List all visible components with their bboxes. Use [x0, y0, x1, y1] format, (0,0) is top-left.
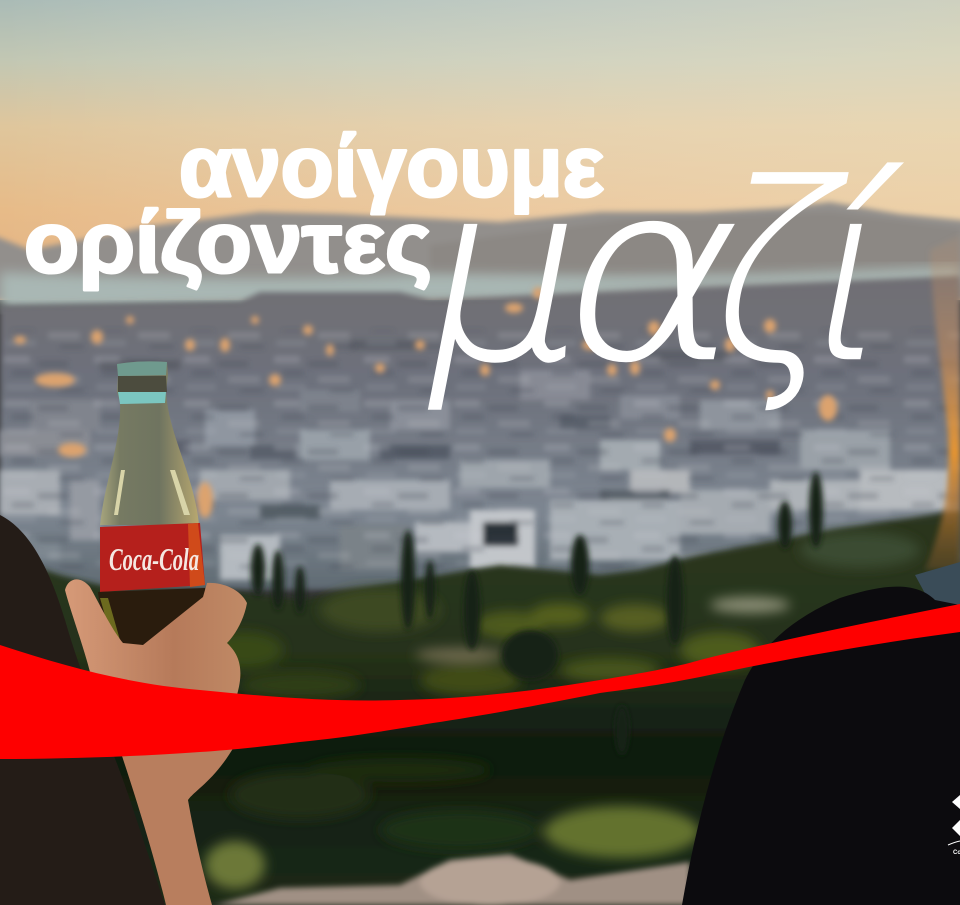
cypress trees	[251, 472, 823, 755]
buildings	[0, 340, 950, 580]
bottle	[98, 361, 206, 646]
large word: α	[538, 132, 774, 415]
hand holding the bottle	[65, 579, 247, 710]
headline	[24, 119, 929, 415]
glass highlights	[114, 470, 190, 515]
collar	[915, 562, 960, 612]
sea	[0, 266, 960, 310]
sky	[0, 0, 960, 300]
person right	[682, 235, 960, 905]
dark top	[682, 587, 960, 905]
large word: ί	[789, 132, 929, 415]
distant mountains	[0, 202, 960, 300]
neck rings	[117, 361, 167, 376]
trees	[0, 472, 960, 905]
line 2: ορίζοντες	[24, 195, 432, 291]
glass	[100, 361, 199, 525]
rooftop texture	[0, 330, 960, 570]
red ribbon	[0, 604, 960, 759]
bokeh lights	[14, 287, 837, 518]
cola liquid	[98, 588, 206, 646]
rocks foreground	[215, 854, 690, 905]
person left: shoulder	[0, 515, 165, 905]
logo mark bottom right	[948, 795, 960, 856]
logo script: Coca-Cola	[109, 541, 199, 577]
arm below ribbon	[120, 745, 235, 905]
large word: μ	[402, 132, 612, 415]
line 1: ανοίγουμε	[179, 119, 604, 215]
hair	[925, 235, 960, 570]
label	[100, 523, 205, 592]
city	[0, 276, 960, 590]
large word: ζ	[691, 132, 866, 415]
